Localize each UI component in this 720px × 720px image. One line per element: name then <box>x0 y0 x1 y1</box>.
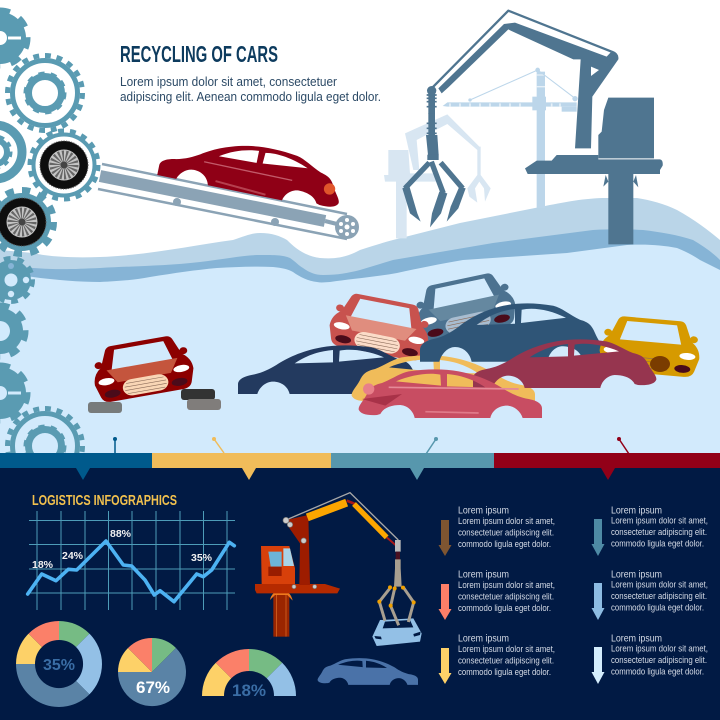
arrow coral <box>438 584 452 620</box>
colored section bars <box>0 453 720 480</box>
pie chart 67%: 67% <box>136 678 170 697</box>
text row one right <box>611 506 708 548</box>
gears column <box>0 12 98 484</box>
crane grab <box>402 94 466 227</box>
text row one <box>458 506 555 549</box>
chart labels: 18% <box>32 559 54 571</box>
gear ring left <box>0 125 22 179</box>
grab stem and claws <box>372 540 422 646</box>
pins <box>113 437 629 454</box>
gauge chart 18%: 18% <box>232 681 266 700</box>
crane cab <box>598 98 654 158</box>
chart labels: 35% <box>191 552 213 564</box>
gear ring <box>8 56 82 130</box>
tower crane silhouette <box>443 68 578 208</box>
crane joints <box>283 517 317 589</box>
text row two right: commodo ligula eget dolor. <box>611 602 704 612</box>
side car maroon <box>473 339 656 388</box>
side car pink <box>359 369 542 418</box>
intro text: Lorem ipsum dolor sit amet, consectetuer <box>120 75 337 89</box>
crane arms <box>286 493 398 546</box>
arrow teal <box>592 519 604 556</box>
text row one: Lorem ipsum <box>458 506 509 516</box>
text row three right <box>611 634 708 676</box>
text row two: Lorem ipsum <box>458 570 509 580</box>
text row two right: Lorem ipsum <box>611 570 662 580</box>
arrow pale <box>592 647 604 684</box>
red front car on tires <box>88 333 221 413</box>
text row two right <box>611 570 708 612</box>
text row two <box>458 570 555 613</box>
text row one: Lorem ipsum dolor sit amet, <box>458 516 555 526</box>
text row one: consectetuer adipiscing elit. <box>458 528 554 538</box>
text row three: Lorem ipsum <box>458 634 509 644</box>
intro text <box>120 75 381 104</box>
side car dark blue <box>420 303 603 362</box>
conveyor <box>98 164 359 239</box>
gear middle <box>0 306 25 356</box>
text row two: commodo ligula eget dolor. <box>458 603 551 613</box>
ghost crane silhouette <box>384 114 491 238</box>
red crane <box>255 493 422 646</box>
logistics heading: LOGISTICS INFOGRAPHICS <box>32 492 177 509</box>
dark lower panel <box>0 468 720 720</box>
side car navy <box>238 345 421 394</box>
text row three: consectetuer adipiscing elit. <box>458 656 554 666</box>
crane pedestal <box>270 591 293 637</box>
crane platform and post <box>525 155 663 244</box>
donut chart 35%: 35% <box>43 657 75 674</box>
gear bottom ring <box>8 408 82 484</box>
pie chart 67% <box>118 638 186 706</box>
chart labels: 24% <box>62 550 84 562</box>
arrow list column two <box>592 506 708 684</box>
front car yellow <box>598 315 702 378</box>
front car coral <box>326 290 435 363</box>
gear small holes <box>0 259 32 301</box>
intro text: adipiscing elit. Aenean commodo ligula eget dolor. <box>120 90 381 104</box>
text row one right: commodo ligula eget dolor. <box>611 538 704 548</box>
gear with tire lower <box>0 192 52 252</box>
gear lower <box>0 366 26 420</box>
crane arm <box>433 11 612 87</box>
gauge chart 18% <box>202 649 296 700</box>
text row one right: Lorem ipsum <box>611 506 662 516</box>
title: RECYCLING OF CARS <box>120 41 278 67</box>
scrap cars pile <box>238 269 702 418</box>
text row three: commodo ligula eget dolor. <box>458 667 551 677</box>
blue side car <box>318 658 418 685</box>
arrow brown <box>438 520 452 556</box>
text row two: consectetuer adipiscing elit. <box>458 592 554 602</box>
gear top <box>0 12 26 64</box>
crane base and cab <box>255 546 340 593</box>
text row three right: Lorem ipsum <box>611 634 662 644</box>
crane mast <box>286 515 310 585</box>
text row three right: commodo ligula eget dolor. <box>611 666 704 676</box>
donut chart 35% <box>16 621 102 707</box>
background hills <box>0 0 720 460</box>
chart labels <box>32 528 213 571</box>
line chart <box>28 511 235 610</box>
gear with tire upper <box>30 131 98 199</box>
car in grab <box>372 618 422 646</box>
chart labels: 88% <box>110 528 132 540</box>
red car on conveyor <box>157 127 347 212</box>
front car blue <box>410 269 519 344</box>
text row one: commodo ligula eget dolor. <box>458 539 551 549</box>
text row two: Lorem ipsum dolor sit amet, <box>458 580 555 590</box>
text row three <box>458 634 555 677</box>
text row three: Lorem ipsum dolor sit amet, <box>458 644 555 654</box>
arrow list column one <box>438 506 555 684</box>
brown patch <box>650 356 670 372</box>
arrow light blue <box>592 583 604 620</box>
arrow yellow <box>438 648 452 684</box>
main crane silhouette <box>402 11 663 244</box>
side car yellow <box>352 355 535 404</box>
